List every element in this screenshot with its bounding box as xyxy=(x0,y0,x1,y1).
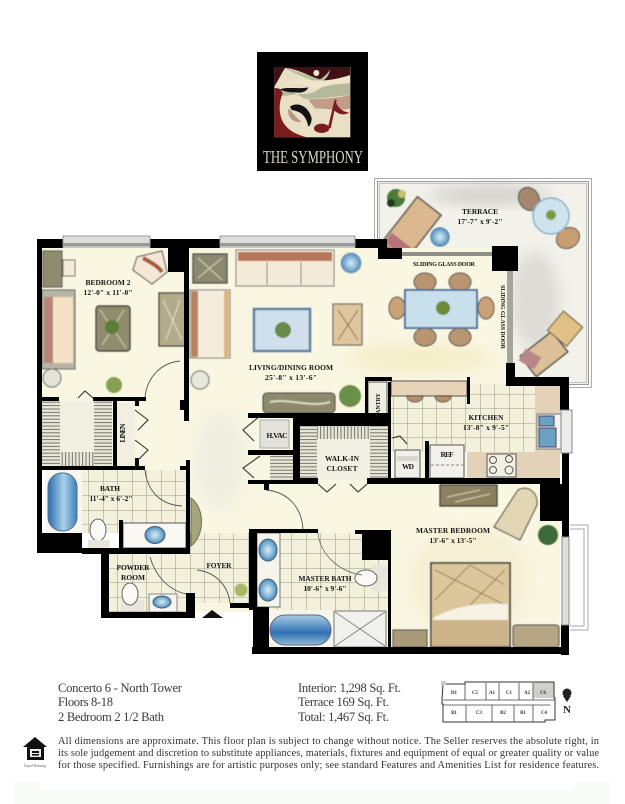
label: master bath: MASTER BATH xyxy=(298,574,352,583)
icon: refrigerator xyxy=(430,445,464,478)
bed xyxy=(431,563,510,647)
master bath walls xyxy=(249,530,257,610)
kitchen walls xyxy=(365,377,392,381)
kitchen stools xyxy=(407,396,451,402)
label: pantry: PANTRY xyxy=(376,392,382,417)
disclaimer: its sole judgement and discretion to substitute appliances, materials, fixtures and equipment of equal or greater quality or value xyxy=(58,748,599,759)
icon: stove xyxy=(487,454,516,477)
chest xyxy=(159,293,186,346)
service core walls xyxy=(248,413,388,418)
nightstand xyxy=(43,251,62,287)
plant xyxy=(106,377,122,393)
label: walk-in closet xyxy=(325,454,360,473)
label: living dining room xyxy=(249,363,333,382)
label: bedroom 2: BEDROOM 2 xyxy=(86,278,131,287)
icon: north compass xyxy=(562,688,572,716)
key plan: C6 xyxy=(540,691,547,696)
area information xyxy=(298,681,401,724)
key plan: B1 xyxy=(520,711,526,716)
label: H.VAC: H.VAC xyxy=(266,431,288,440)
disclaimer: All dimensions are approximate. This floor plan is subject to change without notice. The Seller reserves the absolute right, in xyxy=(58,736,600,747)
label: sliding glass door side: SLIDING GLASS DOOR xyxy=(499,285,505,350)
side table xyxy=(193,254,227,283)
chaise xyxy=(494,488,537,540)
label: walk-in closet: WALK-IN xyxy=(325,454,360,463)
label: bath: 11'-4" x 6'-2" xyxy=(90,494,132,503)
foyer plant xyxy=(234,584,248,596)
key plan: C4 xyxy=(541,711,548,716)
label: bath xyxy=(90,484,132,503)
key plan: D1 xyxy=(451,691,458,696)
terrace side table xyxy=(430,228,450,246)
terrace plant xyxy=(387,189,406,207)
icon: equal housing opportunity: Equal Housing xyxy=(24,764,46,768)
left sofa xyxy=(190,290,230,358)
label: sliding glass door top: SLIDING GLASS DOOR xyxy=(413,262,476,268)
label: foyer: FOYER xyxy=(206,561,232,570)
icon: kitchen sink xyxy=(537,414,561,449)
walls xyxy=(37,239,569,655)
label: master bedroom: 13'-6" x 13'-5" xyxy=(430,536,476,545)
area information: Terrace 169 Sq. Ft. xyxy=(298,695,389,709)
icon: powder toilet xyxy=(121,583,144,611)
nightstands xyxy=(393,630,427,647)
label: bath: BATH xyxy=(100,484,120,493)
icon: north compass: N xyxy=(563,704,571,716)
label: kitchen: KITCHEN xyxy=(468,413,504,422)
icon: master vanity xyxy=(257,533,280,607)
coffee table xyxy=(254,309,310,351)
H.VAC unit xyxy=(260,420,289,448)
entrance arrow xyxy=(202,610,223,618)
ottoman xyxy=(96,306,130,351)
dining chairs xyxy=(414,273,436,291)
label: bedroom 2 xyxy=(84,278,132,297)
unit information: 2 Bedroom 2 1/2 Bath xyxy=(58,710,165,724)
label: powder room: ROOM xyxy=(121,573,145,582)
tiled areas xyxy=(82,384,536,612)
disclaimer xyxy=(58,736,600,771)
key plan xyxy=(441,681,555,722)
area information: Interior: 1,298 Sq. Ft. xyxy=(298,681,401,695)
key plan: B2 xyxy=(500,711,506,716)
unit information xyxy=(58,681,183,724)
terrace label: TERRACE xyxy=(462,207,498,216)
top sofa xyxy=(236,250,334,286)
plant xyxy=(538,525,558,545)
bath walls xyxy=(37,533,82,553)
windows and sliding doors xyxy=(63,236,588,630)
label: powder room xyxy=(116,563,150,582)
area information: Total: 1,467 Sq. Ft. xyxy=(298,710,389,724)
label: living dining room: LIVING/DINING ROOM xyxy=(249,363,333,372)
terrace label xyxy=(458,207,502,226)
panel: living and dining furniture xyxy=(190,250,494,413)
dresser xyxy=(440,485,497,506)
pantry xyxy=(368,382,387,422)
label: washer dryer: WD xyxy=(402,462,414,471)
key plan: C3 xyxy=(476,711,483,716)
label: powder room: POWDER xyxy=(116,563,150,572)
logo: The Symphony xyxy=(257,52,368,171)
logo wordmark: THE SYMPHONY xyxy=(263,147,363,167)
panel: bedroom 2 furniture xyxy=(42,251,186,393)
terrace lounge chair xyxy=(382,197,441,261)
panel: master bedroom furniture xyxy=(393,485,559,647)
icon: bath toilet xyxy=(88,519,110,548)
icon: bath tub xyxy=(45,470,82,533)
lamp xyxy=(43,369,61,387)
plant xyxy=(339,385,361,407)
dining table xyxy=(405,290,477,328)
label: bedroom 2: 12'-0" x 11'-0" xyxy=(84,288,132,297)
key plan: A2 xyxy=(524,691,531,696)
bedroom closet walls xyxy=(42,397,59,401)
key plan: C5 xyxy=(472,691,479,696)
label: master bedroom: MASTER BEDROOM xyxy=(416,526,490,535)
label: kitchen: 13'-8" x 9'-5" xyxy=(463,423,509,432)
icon: washer dryer xyxy=(395,450,420,478)
key plan: B1 xyxy=(451,711,457,716)
label: master bath: 10'-6" x 9'-6" xyxy=(304,584,346,593)
label: master bath xyxy=(298,574,352,593)
icon: shower xyxy=(334,611,386,647)
label: master bedroom xyxy=(416,526,490,545)
sofa xyxy=(42,290,75,369)
icon: master tub xyxy=(269,610,334,647)
powder room walls xyxy=(101,553,109,618)
icon: equal housing opportunity xyxy=(23,737,47,768)
key plan: A1 xyxy=(489,691,496,696)
floor slab xyxy=(42,248,560,647)
label: refrigerator: REF xyxy=(440,450,454,459)
terrace xyxy=(374,178,592,388)
label: linen: LINEN xyxy=(118,423,127,442)
terrace dining table and chairs xyxy=(514,184,583,253)
label: walk-in closet: CLOSET xyxy=(326,464,358,473)
icon: bath vanity xyxy=(123,523,186,548)
lamps xyxy=(341,253,361,273)
label: living dining room: 25'-8" x 13'-6" xyxy=(265,373,317,382)
key plan: C1 xyxy=(506,691,513,696)
bathroom fixtures xyxy=(45,470,387,647)
armchair xyxy=(133,251,167,284)
icon: master toilet xyxy=(355,565,387,591)
armchair xyxy=(333,304,362,345)
icon: powder sink xyxy=(149,594,177,612)
terrace lower lounge and ottoman xyxy=(519,311,583,377)
door swings xyxy=(78,361,407,603)
kitchen counters and appliances xyxy=(260,381,561,480)
media console xyxy=(263,393,335,413)
unit information: Floors 8-18 xyxy=(58,695,113,709)
disclaimer: for those specified. Furnishings are for artistic purposes only; see standard Features and Amenities List for residence features. xyxy=(58,760,599,771)
terrace label: 17'-7" x 9'-2" xyxy=(458,217,502,226)
unit information: Concerto 6 - North Tower xyxy=(58,681,183,695)
foyer console xyxy=(191,498,202,546)
closet hatch areas xyxy=(42,401,390,480)
label: kitchen xyxy=(463,413,509,432)
